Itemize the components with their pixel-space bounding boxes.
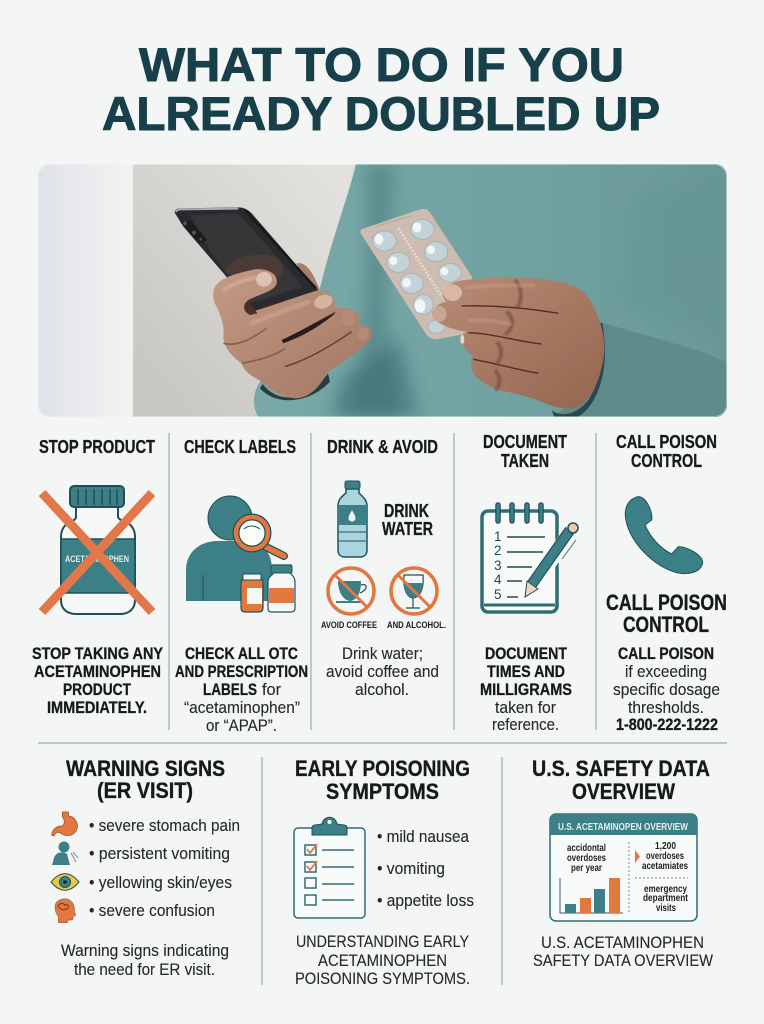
- caption: warning signs: [61, 942, 229, 979]
- text: document times: taken for: [495, 699, 556, 717]
- caption: warning signs: Warning signs indicating: [61, 942, 229, 960]
- list: warning signs: • severe confusion: [89, 902, 215, 920]
- data card: U.S. ACETAMINOPEN OVERVIEW: [558, 821, 688, 833]
- icon: notepad and pen: 2: [494, 543, 502, 558]
- label: avoid coffee and alcohol: AND ALCOHOL.: [387, 620, 446, 631]
- text: stop taking: IMMEDIATELY.: [47, 699, 147, 717]
- text: call poison thresholds: CALL POISON: [618, 645, 714, 663]
- left hand: [213, 269, 372, 400]
- caption: understanding symptoms: UNDERSTANDING EARLY: [296, 933, 469, 951]
- text: call poison thresholds: if exceeding: [625, 663, 707, 681]
- label: drink water: DRINK: [384, 501, 429, 521]
- panel: warning signs: [51, 756, 240, 979]
- heading: early poisoning symptoms: SYMPTOMS: [326, 779, 439, 804]
- card text: emergency visits: visits: [656, 902, 676, 914]
- card text: overdoses: 1,200: [655, 840, 676, 852]
- photo: hands holding phone and blister pack: [38, 164, 727, 418]
- text: drink water avoid: alcohol.: [355, 681, 409, 699]
- heading: U.S. safety data: U.S. SAFETY DATA: [532, 756, 710, 781]
- icon: person vomiting: [52, 842, 78, 865]
- text: call poison thresholds: thresholds.: [628, 699, 704, 717]
- heading: warning signs: (ER VISIT): [97, 778, 193, 803]
- icon: stomach: [52, 812, 78, 836]
- card text: overdoses: acetamiates: [642, 860, 688, 872]
- list: symptoms: • mild nausea: [377, 828, 470, 846]
- card text: accidental overdoses: accidontal: [567, 842, 606, 854]
- text: check all labels: [175, 645, 308, 735]
- icon: yellow eye: [51, 874, 79, 890]
- caption: understanding symptoms: POISONING SYMPTOMS.: [295, 970, 470, 988]
- text: check all labels: for: [262, 681, 281, 699]
- icon: notepad and pen: 5: [494, 587, 502, 602]
- heading: call poison control: CONTROL: [631, 451, 702, 471]
- text: check all labels: CHECK ALL OTC: [185, 645, 298, 663]
- heading: call poison control: [616, 432, 717, 471]
- text: document times: MILLIGRAMS: [480, 681, 572, 699]
- blister pack: [360, 209, 472, 339]
- text: drink water avoid: Drink water;: [342, 645, 423, 663]
- icon: clipboard checklist: [294, 817, 365, 918]
- caption: U.S. overview: U.S. ACETAMINOPHEN: [541, 934, 704, 952]
- text: document times: reference.: [492, 716, 559, 734]
- text: call poison thresholds: 1-800-222-1222: [616, 716, 718, 734]
- card text: emergency visits: emergency: [644, 883, 687, 895]
- text: call poison thresholds: [613, 645, 720, 734]
- heading: U.S. safety data: OVERVIEW: [572, 779, 675, 804]
- label: avoid coffee and alcohol: AVOID COFFEE: [321, 620, 377, 631]
- text: stop taking: ACETAMINOPHEN: [34, 663, 161, 681]
- label: drink water: WATER: [382, 519, 433, 539]
- arrow marker: [635, 850, 640, 863]
- panel: call poison control: [606, 432, 727, 734]
- text: call poison thresholds: specific dosage: [613, 681, 720, 699]
- heading: document taken: [483, 432, 567, 471]
- list: symptoms: [377, 828, 474, 910]
- text: drink water avoid: avoid coffee and: [326, 663, 439, 681]
- icon: notepad and pen: 3: [494, 558, 502, 573]
- text: drink water avoid: [326, 645, 439, 699]
- heading: warning signs: [66, 756, 225, 803]
- panel: early poisoning symptoms: [294, 756, 474, 988]
- heading: document taken: DOCUMENT: [483, 432, 567, 452]
- list: warning signs: • persistent vomiting: [89, 845, 230, 863]
- text: check all labels: AND PRESCRIPTION: [175, 663, 308, 681]
- caption: U.S. overview: [533, 934, 713, 970]
- panel: stop product: [32, 437, 163, 717]
- label: drink water: [382, 501, 433, 539]
- icon: person with magnifier and bottles: [186, 496, 295, 612]
- heading: U.S. safety data: [532, 756, 710, 804]
- text: check all labels: LABELS: [203, 681, 257, 699]
- subheading: call poison control: CALL POISON: [606, 590, 727, 615]
- card text: overdoses: overdoses: [646, 850, 684, 862]
- title: WHAT TO DO IF YOU: [139, 38, 624, 91]
- title: [102, 38, 660, 140]
- icon: confused head: [55, 899, 76, 923]
- caption: understanding symptoms: ACETAMINOPHEN: [318, 952, 447, 970]
- text: document times: DOCUMENT: [485, 645, 567, 663]
- data card: [550, 814, 697, 921]
- icon: no alcohol: [391, 568, 437, 614]
- text: document times: [480, 645, 572, 734]
- icon: notepad and pen: 4: [494, 572, 502, 587]
- icon: water bottle: [338, 481, 367, 557]
- card text: accidental overdoses: per year: [571, 862, 602, 874]
- text: document times: TIMES AND: [487, 663, 565, 681]
- bar chart: [560, 878, 623, 913]
- right hand: [432, 277, 605, 418]
- card text: emergency visits: [643, 883, 688, 914]
- list: warning signs: • yellowing skin/eyes: [89, 874, 232, 892]
- icon: notepad and pen: 1: [494, 529, 502, 544]
- list: warning signs: • severe stomach pain: [89, 817, 240, 835]
- heading: check labels: CHECK LABELS: [184, 437, 296, 457]
- heading: stop product: STOP PRODUCT: [39, 437, 155, 457]
- heading: document taken: TAKEN: [501, 451, 549, 471]
- card text: overdoses: [642, 840, 688, 872]
- phone: [174, 207, 320, 310]
- text: stop taking: PRODUCT: [63, 681, 131, 699]
- panel: check labels: [175, 437, 308, 735]
- heading: early poisoning symptoms: EARLY POISONING: [295, 756, 470, 781]
- subheading: call poison control: [606, 590, 727, 637]
- list: symptoms: • vomiting: [377, 860, 445, 878]
- icon: no coffee: [328, 568, 374, 614]
- panel: drink and avoid: [321, 437, 446, 699]
- heading: call poison control: CALL POISON: [616, 432, 717, 452]
- subheading: call poison control: CONTROL: [623, 612, 709, 637]
- icon: crossed acetaminophen bottle: ACETAMINOPHEN: [65, 554, 129, 565]
- list: warning signs: [89, 817, 240, 920]
- caption: U.S. overview: SAFETY DATA OVERVIEW: [533, 952, 713, 970]
- icon: notepad and pen: [482, 505, 578, 612]
- caption: understanding symptoms: [295, 933, 470, 988]
- title: ALREADY DOUBLED UP: [102, 87, 660, 140]
- sleeve: [552, 322, 727, 417]
- heading: drink and avoid: DRINK & AVOID: [327, 437, 438, 457]
- label: avoid coffee and alcohol: [321, 620, 446, 631]
- icon: telephone handset: [625, 497, 703, 574]
- dividers: [38, 433, 727, 985]
- panel: U.S. safety data: [532, 756, 713, 970]
- panel: document taken: [480, 432, 578, 734]
- heading: early poisoning symptoms: [295, 756, 470, 804]
- text: stop taking: STOP TAKING ANY: [32, 645, 163, 663]
- text: stop taking: [32, 645, 163, 717]
- heading: warning signs: WARNING SIGNS: [66, 756, 225, 781]
- caption: warning signs: the need for ER visit.: [74, 961, 215, 979]
- card text: emergency visits: department: [643, 892, 688, 904]
- icon: crossed acetaminophen bottle: [42, 486, 152, 614]
- text: check all labels: “acetaminophen”: [184, 699, 300, 717]
- list: symptoms: • appetite loss: [377, 892, 474, 910]
- card text: accidental overdoses: [567, 842, 606, 874]
- text: check all labels: or “APAP”.: [206, 717, 277, 735]
- card text: accidental overdoses: overdoses: [567, 852, 606, 864]
